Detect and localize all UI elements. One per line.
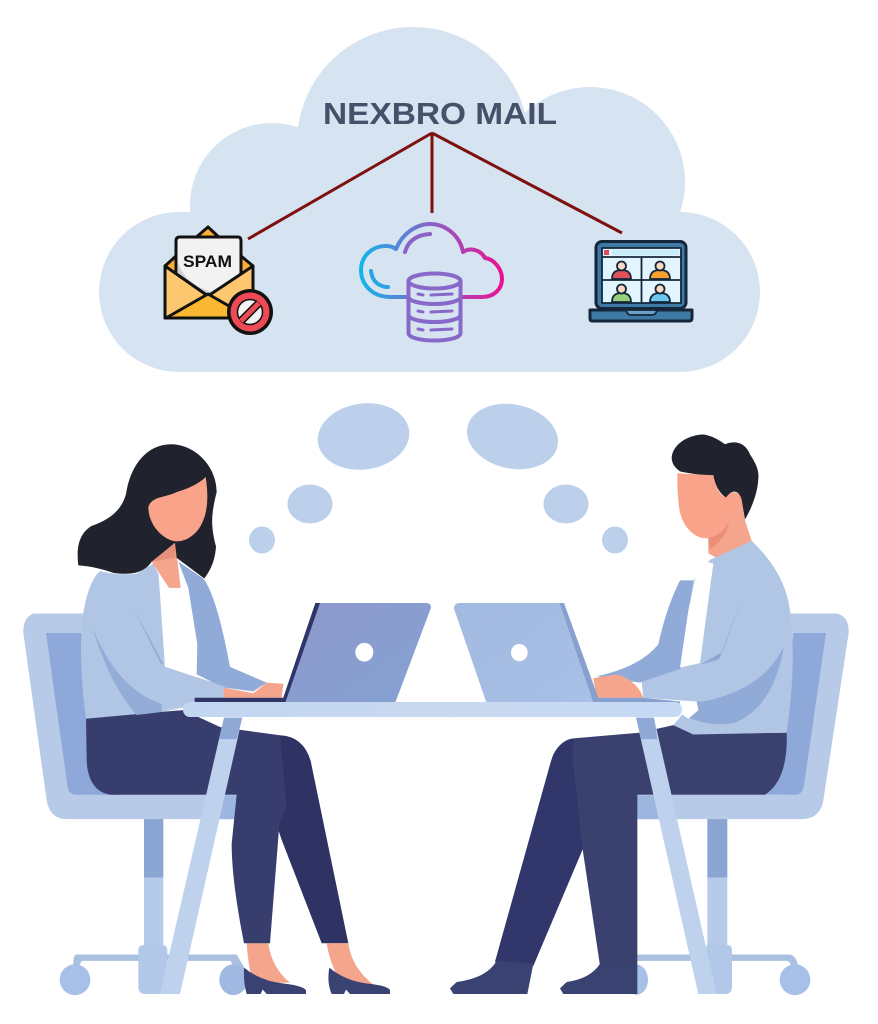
back arm — [178, 562, 267, 691]
laptop: woman — [194, 603, 431, 703]
table leg: woman side — [160, 718, 242, 994]
participant: top-left — [612, 262, 631, 279]
connector lines from title to icons — [248, 133, 622, 239]
face: man — [677, 473, 742, 538]
skin: ankles — [247, 943, 373, 985]
hair — [78, 444, 217, 579]
table top — [183, 702, 682, 717]
table leg: man side — [636, 718, 717, 994]
title: NEXBRO MAIL — [323, 96, 557, 131]
shoes — [244, 968, 390, 994]
figure: woman at chair — [23, 444, 431, 995]
face — [148, 477, 207, 541]
hand: man — [593, 674, 643, 698]
icon: spam envelope: SPAM — [183, 252, 232, 271]
jacket — [81, 563, 223, 719]
neck: man — [708, 498, 752, 558]
shoes: man — [450, 961, 637, 994]
front arm — [163, 666, 224, 710]
sweater — [642, 541, 793, 735]
icon: video conference laptop — [590, 242, 692, 321]
thought bubbles: man — [461, 396, 628, 554]
neck — [152, 541, 181, 588]
participant: bottom-left — [612, 284, 631, 302]
panel: cloud background — [99, 27, 760, 372]
participant: bottom-right — [650, 284, 670, 302]
pants: man — [495, 725, 787, 966]
hair: man — [672, 435, 758, 519]
thought bubbles: woman — [249, 397, 414, 554]
hand — [223, 683, 283, 698]
white shirt — [158, 571, 198, 710]
white collar and tie — [680, 562, 713, 668]
far leg — [277, 735, 348, 943]
chair: woman — [23, 613, 247, 995]
chair: man — [625, 613, 849, 995]
icon: spam envelope — [165, 227, 273, 335]
jacket shadow — [92, 626, 162, 715]
back arm: man — [597, 580, 693, 683]
participant: top-right — [650, 262, 670, 279]
far leg: man — [495, 738, 583, 966]
pants: near leg — [86, 710, 287, 943]
figure: man at chair — [450, 435, 849, 995]
laptop: man — [454, 603, 680, 703]
icon: cloud database — [361, 224, 502, 340]
sweater shadow — [685, 646, 784, 724]
